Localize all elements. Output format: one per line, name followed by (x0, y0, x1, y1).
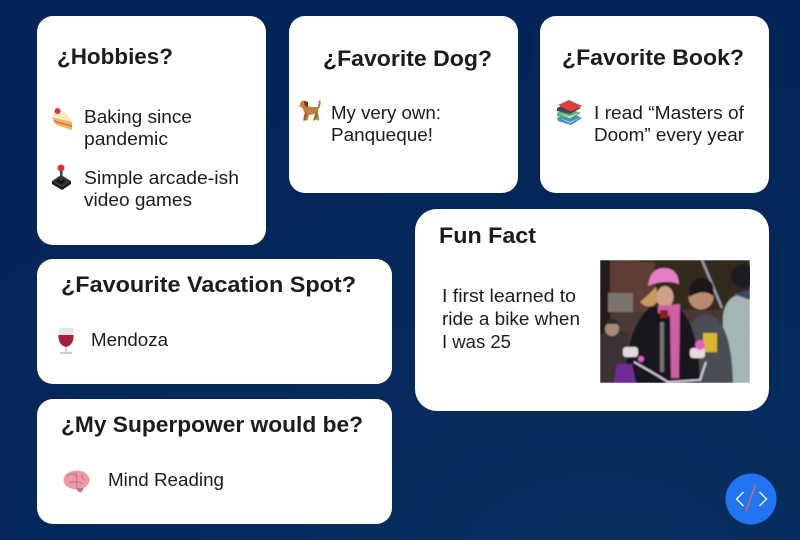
text: games: Simple arcade-ish (84, 168, 239, 188)
text: games: video games (84, 190, 192, 210)
text: baking: pandemic (84, 129, 168, 149)
text: fun fact (442, 286, 580, 352)
heading: superpower: ¿My Superpower would be? (61, 412, 363, 437)
icon: wine glass (58, 328, 74, 354)
text: book: I read “Masters of (594, 103, 745, 123)
text: fun fact: I was 25 (442, 332, 511, 352)
heading: hobbies: ¿Hobbies? (57, 44, 173, 69)
icon: cake (52, 108, 72, 130)
icon: joystick (52, 164, 71, 190)
button: code icon (726, 474, 776, 524)
text: baking (84, 107, 192, 149)
panel: vacation spot (37, 259, 392, 384)
text: book: Doom” every year (594, 125, 744, 145)
text: games (84, 168, 239, 210)
panel: fun fact (415, 209, 769, 411)
panel: favorite dog (289, 16, 518, 193)
heading: favorite book: ¿Favorite Book? (562, 45, 744, 70)
text: mendoza: Mendoza (91, 330, 169, 350)
icon: books (557, 100, 582, 125)
text: baking: Baking since (84, 107, 192, 127)
heading: vacation spot: ¿Favourite Vacation Spot? (61, 272, 356, 297)
icon: brain (64, 470, 90, 492)
icon: dog (298, 100, 320, 120)
text: dog (331, 103, 441, 145)
text: dog: My very own: (331, 103, 441, 123)
panel: superpower (37, 399, 392, 524)
text: mind reading: Mind Reading (108, 470, 224, 490)
text: fun fact: ride a bike when (442, 309, 580, 329)
photo: learning to ride a bike (600, 260, 755, 383)
text: fun fact: I first learned to (442, 286, 576, 306)
heading: fun fact: Fun Fact (439, 223, 537, 248)
heading: favorite dog: ¿Favorite Dog? (323, 46, 492, 71)
panel: favorite book (540, 16, 769, 193)
text: dog: Panqueque! (331, 125, 433, 145)
text: book (594, 103, 745, 145)
panel: hobbies (37, 16, 266, 245)
